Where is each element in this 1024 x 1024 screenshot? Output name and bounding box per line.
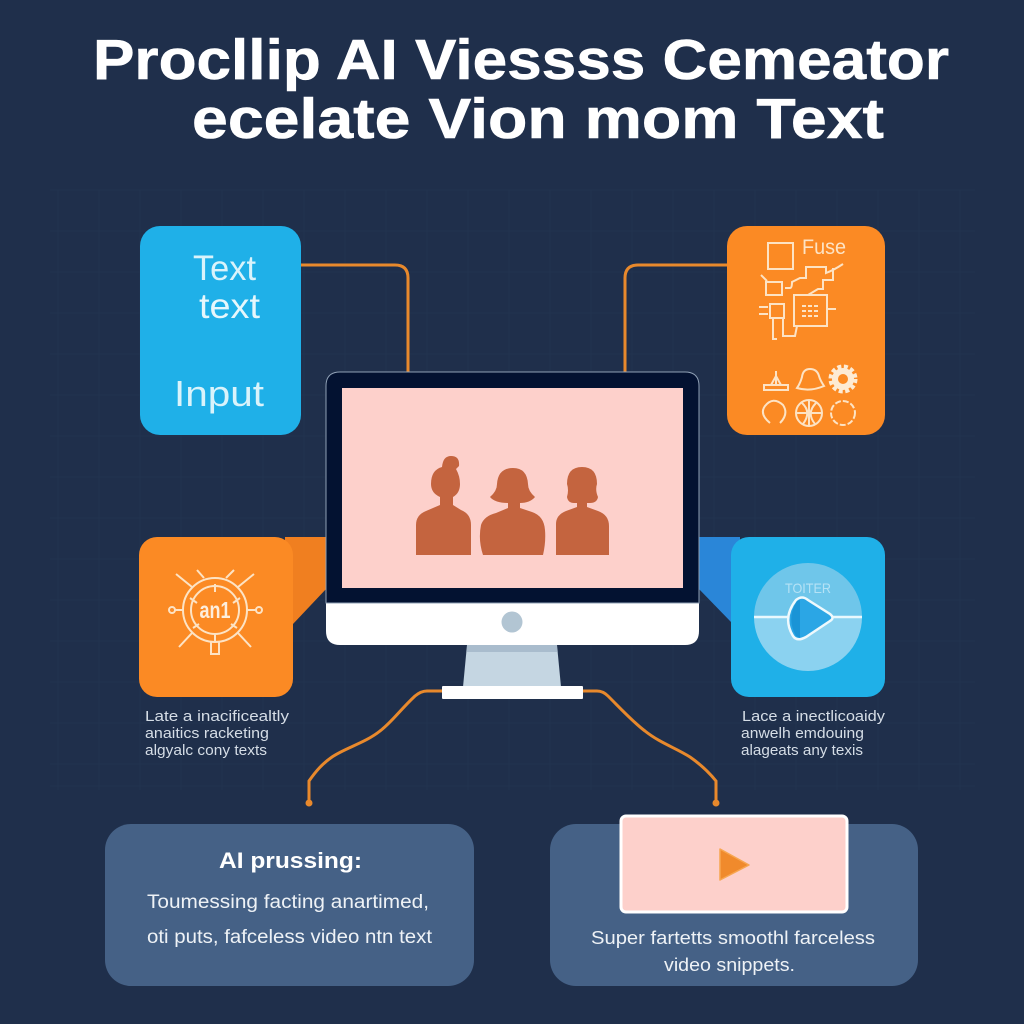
connector: input card to monitor — [301, 265, 408, 373]
wedge: orange connector — [285, 537, 327, 624]
panel: text input card: Input — [174, 373, 264, 414]
panel: text input card: text — [199, 287, 260, 326]
icon: joystick — [764, 371, 788, 390]
text: right description — [741, 708, 886, 759]
monitor stand — [442, 645, 583, 699]
title: Procllip AI Viessss Cemeator — [93, 28, 949, 92]
panel: video snippets — [550, 816, 918, 986]
title — [93, 28, 949, 151]
panel: video output card: TOITER — [785, 580, 831, 596]
text: left description: anaitics racketing — [145, 725, 269, 742]
panel: video output card — [731, 537, 885, 697]
text: left description: Late a inacificealtly — [145, 708, 290, 725]
title: ecelate Vion mom Text — [192, 87, 884, 151]
monitor — [326, 372, 699, 699]
monitor screen — [342, 388, 683, 588]
panel: analysis card — [139, 537, 293, 697]
text: left description — [145, 708, 290, 759]
icon: hat — [797, 369, 824, 390]
monitor bezel — [326, 372, 699, 603]
cable: stand to left panel — [306, 691, 442, 806]
power button — [502, 612, 522, 632]
panel: video snippets: video snippets. — [664, 955, 795, 975]
icon: play button — [788, 598, 832, 639]
icon: globe — [796, 400, 822, 426]
silhouettes: three people — [416, 456, 609, 555]
text: right description: alageats any texis — [741, 742, 863, 759]
text: right description: anwelh emdouing — [741, 725, 864, 742]
panel: fuse tools card — [727, 226, 885, 435]
panel: text input card: Text — [193, 249, 256, 288]
icon: gear — [830, 366, 856, 392]
panel: analysis card: an1 — [200, 597, 231, 623]
panel: text input card — [140, 226, 301, 435]
panel: AI processing: Toumessing facting anartimed, — [147, 892, 429, 913]
monitor body — [326, 603, 699, 645]
icon: ring — [763, 401, 785, 423]
panel: AI processing — [105, 824, 474, 986]
text: left description: algyalc cony texts — [145, 742, 267, 759]
panel: video snippets: Super fartetts smoothl farceless — [591, 928, 875, 948]
panel: AI processing: AI prussing: — [219, 848, 362, 873]
video thumbnail — [621, 816, 847, 912]
connector: fuse card to monitor — [625, 265, 727, 373]
panel: AI processing: oti puts, fafceless video ntn text — [147, 927, 433, 948]
panel: fuse tools card: Fuse — [802, 236, 846, 259]
text: right description: Lace a inectlicoaidy — [742, 708, 886, 725]
icon: orbit — [831, 401, 855, 425]
wedge: blue connector — [698, 537, 740, 630]
cable: stand to right panel — [583, 691, 720, 806]
